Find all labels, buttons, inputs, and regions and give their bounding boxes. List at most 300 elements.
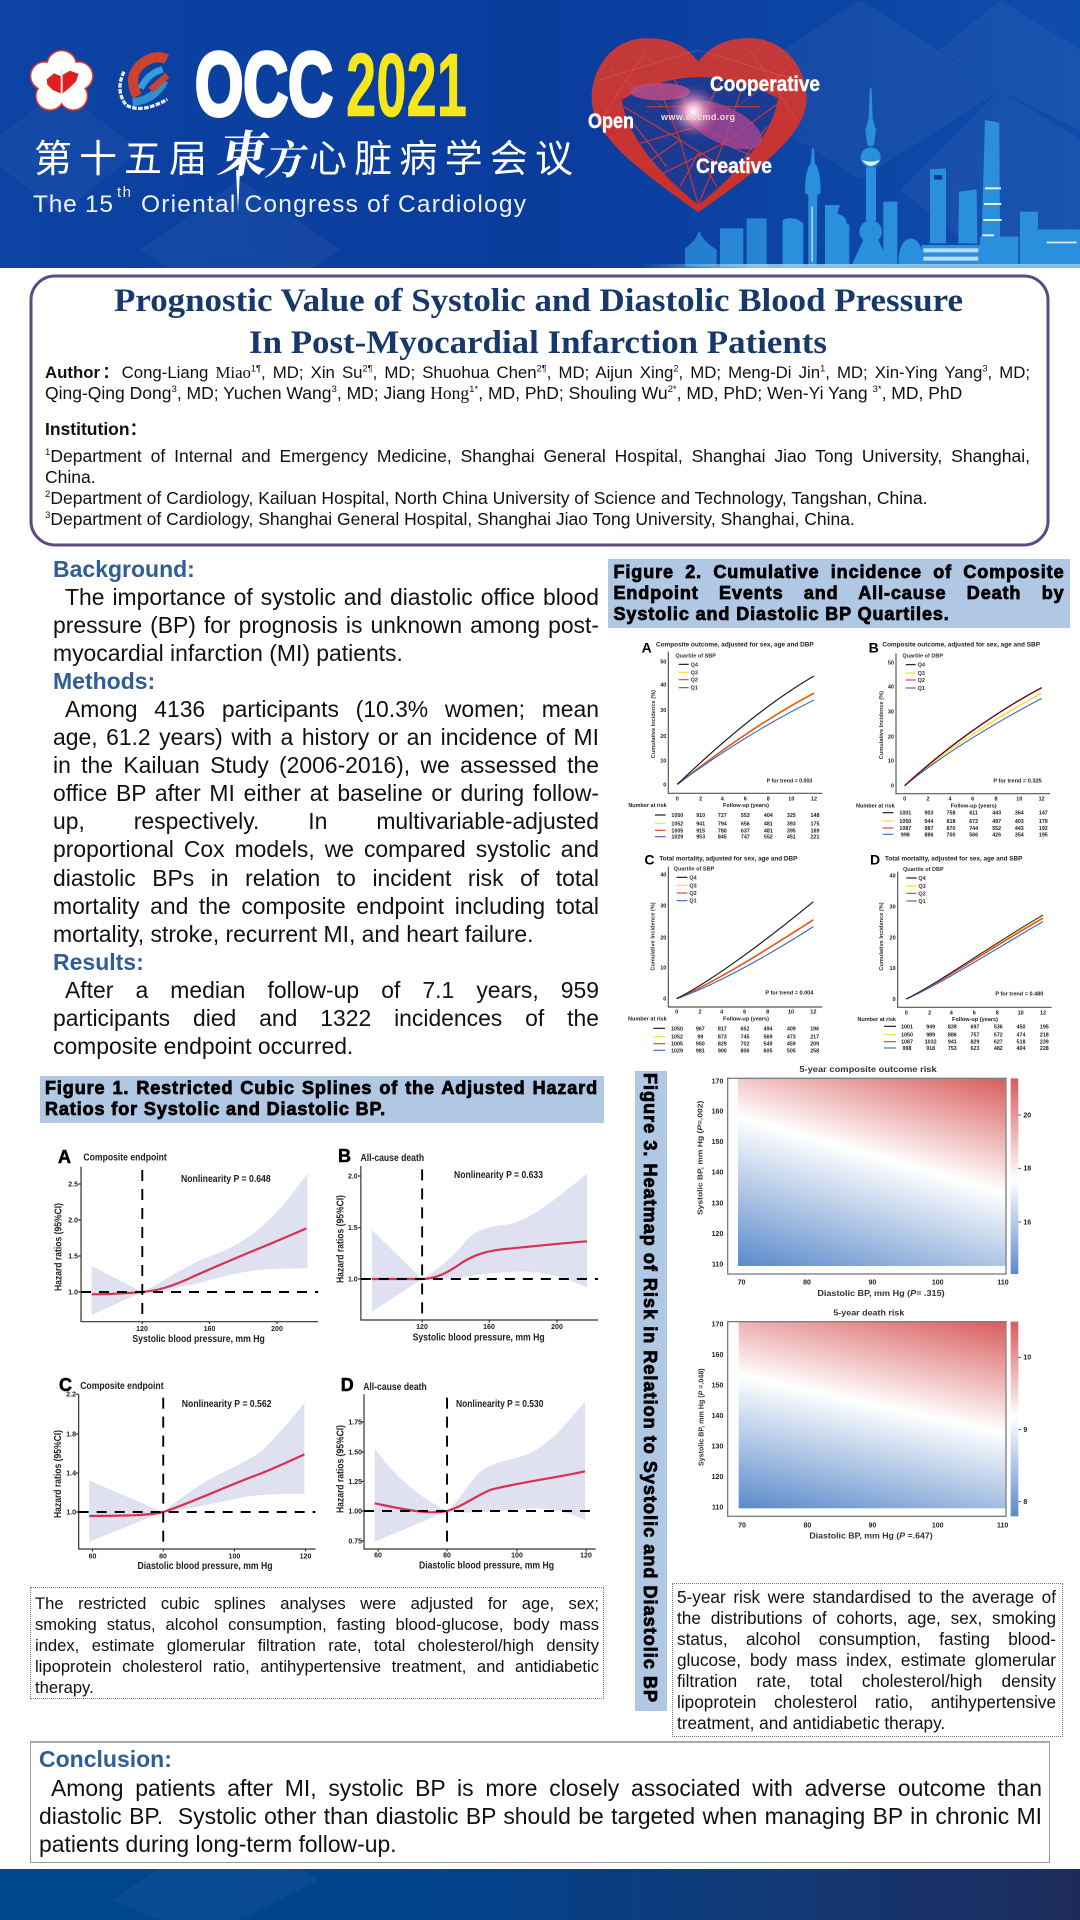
heart labels (588, 73, 820, 178)
chart: 5-year death risk heatmap: 110 (712, 1504, 723, 1511)
chart: 5-year death risk heatmap: 10 (1023, 1355, 1031, 1362)
chart: C total mortality by SBP: 967 (696, 1026, 705, 1032)
chart: D total mortality by DBP: Q4 (918, 876, 927, 882)
chart: C total mortality by SBP: Follow-up (years) (723, 1016, 769, 1022)
chart: B composite outcome by DBP: 497 (992, 819, 1001, 825)
chart: A composite endpoint SBP: 1.0 (68, 1290, 78, 1296)
chart: B composite outcome by DBP: 1087 (899, 826, 911, 832)
chart: A composite outcome by SBP: 552 (764, 835, 773, 841)
chart: B all-cause death SBP: 160 (483, 1324, 495, 1331)
chart: A composite outcome by SBP: Q1 (691, 686, 698, 692)
institution list: China. (45, 466, 96, 486)
chart: B composite outcome by DBP: 998 (901, 832, 910, 838)
chart: D total mortality by DBP: 1032 (925, 1040, 937, 1046)
chart: B composite outcome by DBP: 50 (888, 661, 894, 667)
author list: Qing-Qing Dong3, MD; Yuchen Wang3, MD; Jiang Hong1*, MD, PhD; Shouling Wu2*, MD, PhD; Wen-Yi Yang 3*, MD, PhD (45, 383, 962, 403)
chart: B composite outcome by DBP: P for trend = 0.325 (993, 779, 1042, 785)
chart: D total mortality by DBP: 753 (948, 1046, 957, 1052)
chart: B all-cause death SBP: 1.0 (348, 1276, 358, 1284)
chart: C total mortality by SBP: 806 (741, 1048, 749, 1054)
heart labels: www.occmd.org (660, 112, 735, 122)
chart: B all-cause death SBP: B (338, 1146, 351, 1166)
figure 3 caption: treatment, and antidiabetic therapy. (677, 1713, 945, 1733)
chart: D total mortality by DBP: 829 (971, 1040, 979, 1046)
chart: 5-year death risk heatmap: 90 (868, 1522, 876, 1529)
chart: A composite outcome by SBP: 404 (764, 813, 773, 819)
chart: A composite outcome by SBP: Q3 (691, 670, 698, 676)
chart: B composite outcome by DBP: 6 (971, 796, 974, 802)
institution heading: Institution： (45, 418, 147, 438)
banner (0, 0, 1080, 320)
chart: D total mortality by DBP: 40 (890, 874, 896, 880)
figure 1 heading: Figure 1. Restricted Cubic Splines of the Adjusted Hazard (45, 1078, 598, 1098)
figure 2 heading (608, 559, 1070, 628)
chart: 5-year death risk heatmap (698, 1307, 1031, 1541)
heading: results: Results: (53, 949, 144, 975)
banner title: OCC 2021: OCC (195, 35, 333, 135)
figure 3 caption (672, 1583, 1063, 1737)
chart: 5-year composite outcome risk heatmap: 5-year composite outcome risk (799, 1064, 937, 1074)
title (114, 283, 963, 361)
chart: C composite endpoint DBP: C (59, 1375, 72, 1395)
chart: D total mortality by DBP: 4 (950, 1010, 954, 1016)
banner subtitle: The 15 (33, 191, 113, 218)
chart: 5-year composite outcome risk heatmap: 18 (1023, 1166, 1031, 1173)
chart: D all-cause death DBP: Hazard ratios (95%CI) (336, 1425, 346, 1513)
chart: 5-year death risk heatmap: 150 (712, 1383, 723, 1390)
chart: A composite outcome by SBP: 10 (660, 758, 666, 764)
panel: figure 3 heading bar (635, 1071, 667, 1711)
figure 3 caption: filtration rate, total cholesterol/high density (677, 1671, 1056, 1691)
chart: B composite outcome by DBP (856, 639, 1050, 838)
chart: B composite outcome by DBP: 1050 (899, 819, 911, 825)
chart: C total mortality by SBP: 217 (810, 1035, 819, 1041)
chart: 5-year death risk heatmap: Systolic BP, mm Hg (P =.048) (698, 1368, 705, 1466)
figure 2 heading: Systolic and Diastolic BP Quartiles. (614, 604, 950, 624)
chart: D total mortality by DBP: D (870, 852, 880, 868)
chart: B composite outcome by DBP: 12 (1039, 796, 1045, 802)
chart: D all-cause death DBP: Nonlinearity P = 0.530 (456, 1398, 544, 1410)
chart: A composite outcome by SBP: 845 (718, 835, 727, 841)
chart: A composite outcome by SBP: 0 (663, 782, 666, 788)
chart: 5-year composite outcome risk heatmap: Diastolic BP, mm Hg ( P= .315) (817, 1288, 945, 1298)
chart: B composite outcome by DBP: 566 (969, 832, 978, 838)
chart: B composite outcome by DBP: 192 (1039, 826, 1048, 832)
chart: D total mortality by DBP: Q1 (918, 899, 926, 905)
chart: C total mortality by SBP: 1052 (671, 1035, 683, 1041)
chart: C total mortality by SBP: 950 (696, 1042, 705, 1048)
title box border (31, 276, 1048, 545)
figure 1 caption: lipoprotein cholesterol ratio, antihypertensive treatment, and antidiabetic (35, 1656, 599, 1676)
panel: conclusion (30, 1741, 1050, 1863)
chart: B composite outcome by DBP: 870 (947, 826, 955, 832)
chart: D all-cause death DBP (336, 1375, 596, 1572)
chart: A composite outcome by SBP: 780 (718, 828, 727, 834)
chart: C total mortality by SBP: 99 (697, 1035, 703, 1041)
banner title: Chinese congress name: 第十五届 (34, 139, 207, 181)
heading: conclusion: Conclusion: (39, 1746, 172, 1772)
institution list: 3Department of Cardiology, Shanghai General Hospital, Shanghai Jiao Tong University, Shanghai, China. (45, 508, 855, 528)
figure 2 heading: Endpoint Events and All-cause Death by (614, 582, 1064, 602)
chart: 5-year death risk heatmap: 100 (932, 1522, 944, 1529)
chart: A composite endpoint SBP: 2.5 (68, 1182, 78, 1188)
chart: 5-year death risk heatmap: 110 (997, 1522, 1008, 1529)
chart: C total mortality by SBP: 745 (741, 1035, 749, 1041)
chart: B composite outcome by DBP: 987 (925, 826, 933, 832)
chart: 5-year death risk heatmap: 9 (1023, 1427, 1027, 1434)
chart: C total mortality by SBP: 1005 (671, 1042, 683, 1048)
chart: 5-year composite outcome risk heatmap: 150 (712, 1139, 723, 1146)
banner title: OCC 2021: 2021 (346, 36, 467, 136)
chart: C total mortality by SBP: 30 (660, 904, 666, 910)
chart: A composite endpoint SBP: 200 (271, 1326, 283, 1333)
chart: 5-year composite outcome risk heatmap (695, 1064, 1031, 1298)
chart: C composite endpoint DBP: 2.2 (66, 1392, 76, 1398)
chart: A composite outcome by SBP: 10 (788, 796, 794, 802)
text: conclusion: Among patients after MI, systolic BP is more closely associated with adverse outcome than (51, 1775, 1042, 1801)
chart: A composite endpoint SBP (54, 1147, 318, 1345)
chart: C total mortality by SBP: 459 (787, 1042, 796, 1048)
chart: C total mortality by SBP: 494 (764, 1026, 772, 1032)
chart: C total mortality by SBP: 0 (663, 997, 666, 1003)
chart: A composite endpoint SBP: Nonlinearity P = 0.648 (181, 1173, 271, 1185)
chart: B composite outcome by DBP: 744 (969, 826, 978, 832)
chart: D all-cause death DBP: All-cause death (363, 1382, 427, 1393)
chart: C composite endpoint DBP: 80 (159, 1554, 167, 1560)
chart: B composite outcome by DBP: 0 (891, 784, 894, 790)
text: methods: in the Kailuan Study (2006-2016), we assessed the (53, 752, 599, 778)
text: results: After a median follow-up of 7.1 years, 959 (65, 977, 599, 1003)
chart: 5-year composite outcome risk heatmap: 70 (738, 1279, 746, 1286)
text: background (53, 584, 599, 666)
chart: D total mortality by DBP: 239 (1040, 1040, 1049, 1046)
chart: D all-cause death DBP: D (341, 1375, 354, 1395)
chart: A composite outcome by SBP: 915 (696, 828, 705, 834)
chart: D total mortality by DBP: Cumulative Incidence (%) (879, 902, 885, 971)
chart: C total mortality by SBP: 652 (741, 1026, 749, 1032)
text: methods (53, 696, 599, 947)
chart: D all-cause death DBP: 1.75 (348, 1420, 362, 1426)
chart: 5-year death risk heatmap: 130 (712, 1444, 723, 1451)
chart: D total mortality by DBP: Q2 (918, 891, 926, 897)
chart: D all-cause death DBP: 0.75 (348, 1538, 362, 1546)
chart: B composite outcome by DBP: 195 (1039, 832, 1048, 838)
panel: figure 3 heading bar: Figure 3. Heatmap of Risk in Relation to Systolic and Diastolic BP (640, 1073, 660, 1702)
chart: 5-year composite outcome risk heatmap: Systolic BP, mm Hg (P=.002) (695, 1100, 704, 1215)
chart: B composite outcome by DBP: 886 (925, 832, 933, 838)
heading: background: Background: (53, 556, 195, 582)
figure 3 caption: the distributions of cohorts, age, sex, smoking (677, 1608, 1056, 1628)
chart: D total mortality by DBP: 1050 (901, 1033, 913, 1039)
chart: A composite outcome by SBP: 4 (721, 796, 725, 802)
chart: D total mortality by DBP: 1087 (901, 1040, 913, 1046)
chart: C total mortality by SBP: 209 (810, 1042, 819, 1048)
author list (45, 362, 1030, 403)
figure 3 caption: glucose, body mass index, estimate glomerular (677, 1650, 1056, 1670)
chart: 5-year death risk heatmap: 70 (738, 1522, 746, 1529)
chart: 5-year composite outcome risk heatmap: 170 (712, 1078, 723, 1085)
chart: B composite outcome by DBP: 2 (926, 796, 930, 802)
chart: C total mortality by SBP (628, 851, 822, 1054)
chart: C total mortality by SBP: 981 (696, 1048, 705, 1054)
icon: heart (592, 38, 807, 212)
chart: B composite outcome by DBP: 10 (888, 759, 894, 765)
chart: B composite outcome by DBP: Composite outcome, adjusted for sex, age and SBP (882, 643, 1040, 649)
chart: C total mortality by SBP: 4 (720, 1010, 724, 1016)
chart: D total mortality by DBP: 12 (1040, 1010, 1046, 1016)
chart: A composite outcome by SBP: Composite outcome, adjusted for sex, age and DBP (656, 643, 814, 649)
chart: C total mortality by SBP: 873 (718, 1035, 727, 1041)
chart: B composite outcome by DBP: Q3 (918, 671, 925, 677)
chart: D total mortality by DBP: 998 (903, 1046, 911, 1052)
chart: B composite outcome by DBP: 364 (1015, 811, 1024, 817)
text: methods: age, 61.2 years) with a history or an incidence of MI (53, 724, 599, 750)
author list: Author：Cong-Liang Miao1¶, MD; Xin Su2¶, MD; Shuohua Chen2¶, MD; Aijun Xing2, MD; Meng-Di Jin1, MD; Xin-Ying Yang3, MD; (45, 362, 1030, 382)
chart: A composite outcome by SBP: 910 (696, 813, 705, 819)
panel: figure 2 charts (628, 639, 1052, 1054)
chart: D total mortality by DBP: P for trend = 0.480 (995, 991, 1043, 997)
text: background: myocardial infarction (MI) patients. (53, 640, 403, 666)
chart: A composite outcome by SBP: 794 (718, 821, 727, 827)
text: methods: Among 4136 participants (10.3% women; mean (65, 696, 599, 722)
chart: B composite outcome by DBP: 40 (888, 684, 894, 690)
chart: A composite outcome by SBP: 395 (787, 828, 796, 834)
chart: C total mortality by SBP: 549 (764, 1042, 772, 1048)
chart: A composite outcome by SBP: 2 (699, 796, 702, 802)
chart: C total mortality by SBP: Number at risk (628, 1016, 668, 1022)
figure 1 caption: The restricted cubic splines analyses were adjusted for age, sex; (35, 1594, 599, 1612)
chart: D total mortality by DBP: 2 (928, 1010, 931, 1016)
title: In Post-Myocardial Infarction Patients (249, 325, 827, 361)
chart: D total mortality by DBP: 8 (996, 1010, 999, 1016)
banner subtitle (33, 184, 527, 218)
chart: A composite outcome by SBP: 637 (741, 828, 750, 834)
chart: C total mortality by SBP: 569 (764, 1035, 772, 1041)
chart: C composite endpoint DBP: 1.0 (66, 1510, 76, 1516)
chart: B composite outcome by DBP: 443 (992, 811, 1001, 817)
chart: B composite outcome by DBP: 1001 (899, 811, 911, 817)
chart: D total mortality by DBP: Number at risk (857, 1017, 897, 1023)
chart: D total mortality by DBP: 839 (948, 1024, 957, 1030)
chart: D total mortality by DBP: 195 (1040, 1024, 1049, 1030)
text: background: pressure (BP) for prognosis is unknown among post- (53, 612, 599, 638)
chart: D total mortality by DBP: 989 (926, 1033, 935, 1039)
chart: D all-cause death DBP: 80 (443, 1552, 451, 1560)
chart: A composite outcome by SBP: 1005 (671, 828, 683, 834)
chart: C total mortality by SBP: 1029 (671, 1048, 683, 1054)
chart: B composite outcome by DBP: 426 (992, 832, 1001, 838)
institution list: 2Department of Cardiology, Kailuan Hospital, North China University of Science and Technology, Tangshan, China. (45, 488, 927, 508)
chart: C composite endpoint DBP: 1.8 (66, 1432, 76, 1438)
text: methods: office BP after MI either at baseline or during follow- (53, 780, 599, 806)
chart: D all-cause death DBP: 1.50 (348, 1450, 362, 1456)
text: methods: mortality and the composite endpoint including total (53, 893, 599, 919)
chart: A composite outcome by SBP: 481 (764, 821, 773, 827)
heart labels: Creative (696, 155, 772, 178)
banner subtitle: th (117, 184, 131, 201)
chart: A composite outcome by SBP: 1052 (671, 821, 683, 827)
chart: D total mortality by DBP: 20 (890, 936, 896, 942)
chart: D total mortality by DBP: Q3 (918, 884, 926, 890)
chart: B composite outcome by DBP: 30 (888, 710, 894, 716)
chart: A composite outcome by SBP: Q4 (691, 662, 699, 668)
chart: D all-cause death DBP: Diastolic blood pressure, mm Hg (419, 1560, 554, 1572)
chart: A composite outcome by SBP: 727 (718, 813, 727, 819)
skyline (685, 88, 1080, 267)
chart: C composite endpoint DBP: 100 (229, 1554, 240, 1560)
figure 1 heading (40, 1076, 604, 1123)
chart: 5-year composite outcome risk heatmap: 16 (1023, 1219, 1031, 1226)
chart: D total mortality by DBP: 627 (994, 1040, 1003, 1046)
chart: D all-cause death DBP: 100 (511, 1552, 523, 1560)
chart: C total mortality by SBP: Q2 (689, 891, 697, 897)
chart: C total mortality by SBP: 196 (810, 1026, 819, 1032)
chart: C composite endpoint DBP: Diastolic blood pressure, mm Hg (138, 1560, 272, 1572)
chart: 5-year death risk heatmap: 8 (1023, 1499, 1027, 1506)
chart: D total mortality by DBP: 404 (1017, 1046, 1025, 1052)
chart: A composite outcome by SBP: 451 (787, 835, 796, 841)
chart: B composite outcome by DBP: 552 (992, 826, 1001, 832)
chart: A composite outcome by SBP: Number at risk (628, 803, 668, 809)
chart: D all-cause death DBP: 1.00 (348, 1508, 362, 1516)
chart: C total mortality by SBP: 605 (764, 1048, 772, 1054)
chart: A composite outcome by SBP: 148 (811, 813, 819, 819)
chart: B all-cause death SBP: Systolic blood pressure, mm Hg (413, 1332, 545, 1344)
chart: B composite outcome by DBP: Quartile of DBP (902, 654, 943, 660)
chart: D total mortality by DBP (857, 852, 1052, 1052)
chart: D total mortality by DBP: 0 (893, 997, 896, 1003)
chart: A composite outcome by SBP: 1050 (671, 813, 683, 819)
chart: B composite outcome by DBP: 179 (1039, 819, 1048, 825)
chart: A composite outcome by SBP: Q2 (691, 678, 698, 684)
chart: C composite endpoint DBP: 120 (300, 1554, 311, 1560)
institution list: 1Department of Internal and Emergency Medicine, Shanghai General Hospital, Shanghai Jiao Tong University, Shanghai, (45, 446, 1030, 466)
figure 1 caption (30, 1587, 604, 1699)
banner subtitle: Oriental Congress of Cardiology (141, 191, 527, 218)
chart: C total mortality by SBP: 258 (810, 1048, 819, 1054)
chart: A composite outcome by SBP: 325 (787, 813, 796, 819)
chart: B composite outcome by DBP: 0 (903, 796, 906, 802)
panel: figure 3 heatmaps (695, 1064, 1031, 1541)
heart labels: Open (588, 110, 634, 133)
chart: B composite outcome by DBP: B (869, 639, 879, 655)
chart: C total mortality by SBP: Q1 (689, 899, 697, 905)
banner title: Chinese congress name: 東 (213, 115, 276, 187)
chart: B composite outcome by DBP: 20 (888, 734, 894, 740)
figure 2 heading: Figure 2. Cumulative incidence of Composite (614, 562, 1064, 582)
chart: 5-year death risk heatmap: 170 (712, 1322, 723, 1329)
chart: D total mortality by DBP: 10 (1018, 1010, 1024, 1016)
chart: D total mortality by DBP: 6 (973, 1010, 976, 1016)
chart: A composite endpoint SBP: Hazard ratios (95%CI) (54, 1203, 64, 1291)
text: methods: proportional Cox models, we compared systolic and (53, 836, 599, 862)
text: results (53, 977, 599, 1059)
chart: 5-year composite outcome risk heatmap: 20 (1023, 1112, 1031, 1119)
chart: C composite endpoint DBP (53, 1375, 315, 1572)
chart: C total mortality by SBP: 505 (787, 1048, 796, 1054)
banner title: Chinese congress name: 心脏病学会议 (309, 139, 573, 181)
chart: C total mortality by SBP: 20 (660, 935, 666, 941)
figure 3 caption: status, alcohol consumption, fasting blood- (677, 1629, 1056, 1649)
chart: A composite endpoint SBP: 120 (136, 1326, 148, 1333)
chart: C total mortality by SBP: 702 (741, 1042, 749, 1048)
chart: B composite outcome by DBP: 903 (925, 811, 933, 817)
chart: D total mortality by DBP: 518 (1017, 1040, 1025, 1046)
figure 1 caption: index, estimate glomerular filtration rate, total cholesterol/high density (35, 1636, 599, 1654)
chart: C total mortality by SBP: Q4 (689, 875, 698, 881)
chart: C total mortality by SBP: 12 (810, 1010, 816, 1016)
chart: A composite endpoint SBP: 160 (204, 1326, 215, 1333)
chart: A composite outcome by SBP: 747 (741, 835, 750, 841)
chart: A composite outcome by SBP: 481 (764, 828, 773, 834)
chart: C total mortality by SBP: Quartile of SBP (674, 867, 715, 873)
text: results: participants died and 1322 incidences of the (53, 1005, 599, 1031)
chart: D total mortality by DBP: 886 (948, 1033, 957, 1039)
chart: A composite endpoint SBP: 1.5 (68, 1254, 78, 1260)
chart: A composite outcome by SBP: P for trend = 0.003 (767, 778, 812, 784)
chart: A composite outcome by SBP: 20 (660, 734, 666, 740)
chart: D total mortality by DBP: 10 (890, 966, 896, 972)
chart: 5-year death risk heatmap: 140 (712, 1413, 723, 1420)
text: background: The importance of systolic and diastolic office blood (65, 584, 599, 610)
chart: C total mortality by SBP: Total mortality, adjusted for sex, age and DBP (659, 856, 797, 862)
chart: A composite endpoint SBP: Composite endpoint (83, 1152, 167, 1164)
chart: B composite outcome by DBP: 147 (1039, 811, 1048, 817)
chart: A composite outcome by SBP: 553 (741, 813, 750, 819)
chart: D total mortality by DBP: 1001 (901, 1024, 913, 1030)
chart: C total mortality by SBP: 473 (787, 1035, 796, 1041)
chart: 5-year composite outcome risk heatmap: 80 (803, 1279, 811, 1286)
chart: B composite outcome by DBP: 4 (948, 796, 952, 802)
figure 3 caption: 5-year risk were standardised to the average of (677, 1587, 1056, 1607)
institution list (45, 446, 1030, 528)
chart: 5-year composite outcome risk heatmap: 130 (712, 1200, 723, 1207)
text: conclusion (39, 1775, 1042, 1857)
chart: A composite outcome by SBP: 393 (787, 821, 796, 827)
chart: B composite outcome by DBP: 611 (969, 811, 978, 817)
chart: C composite endpoint DBP: 1.4 (66, 1470, 76, 1478)
chart: C total mortality by SBP: 10 (660, 965, 666, 971)
chart: B composite outcome by DBP: 443 (1015, 826, 1024, 832)
chart: D total mortality by DBP: 757 (971, 1033, 979, 1039)
chart: A composite outcome by SBP: Cumulative Incidence (%) (651, 690, 657, 758)
chart: C total mortality by SBP: 409 (787, 1026, 796, 1032)
chart: A composite outcome by SBP: 1029 (671, 835, 683, 841)
chart: B composite outcome by DBP: Number at risk (856, 803, 896, 809)
chart: B composite outcome by DBP: 354 (1015, 832, 1024, 838)
chart: A composite outcome by SBP: 30 (660, 708, 666, 714)
chart: B composite outcome by DBP: 700 (947, 832, 955, 838)
chart: A composite outcome by SBP: Quartile of SBP (675, 653, 716, 659)
chart: B composite outcome by DBP: Q1 (918, 686, 925, 692)
chart: D total mortality by DBP: 536 (994, 1024, 1003, 1030)
banner title: Chinese congress name: 方 (261, 128, 314, 186)
chart: D total mortality by DBP: 474 (1017, 1033, 1025, 1039)
chart: A composite outcome by SBP: 40 (660, 683, 666, 689)
heading: methods: Methods: (53, 668, 155, 694)
chart: A composite endpoint SBP: Systolic blood pressure, mm Hg (132, 1333, 265, 1345)
chart: D total mortality by DBP: 450 (1017, 1024, 1025, 1030)
chart: A composite outcome by SBP: 50 (660, 660, 666, 666)
chart: B all-cause death SBP: 2.0 (348, 1174, 358, 1180)
chart: D total mortality by DBP: 228 (1040, 1046, 1049, 1052)
chart: 5-year composite outcome risk heatmap: 140 (712, 1170, 723, 1177)
text: methods: up, respectively. In multivariable-adjusted (53, 808, 599, 834)
text block: background, methods, results (53, 556, 599, 1059)
chart: A composite endpoint SBP: A (58, 1147, 71, 1167)
chart: B composite outcome by DBP: 8 (994, 796, 998, 802)
chart: B composite outcome by DBP: Q4 (918, 663, 926, 669)
